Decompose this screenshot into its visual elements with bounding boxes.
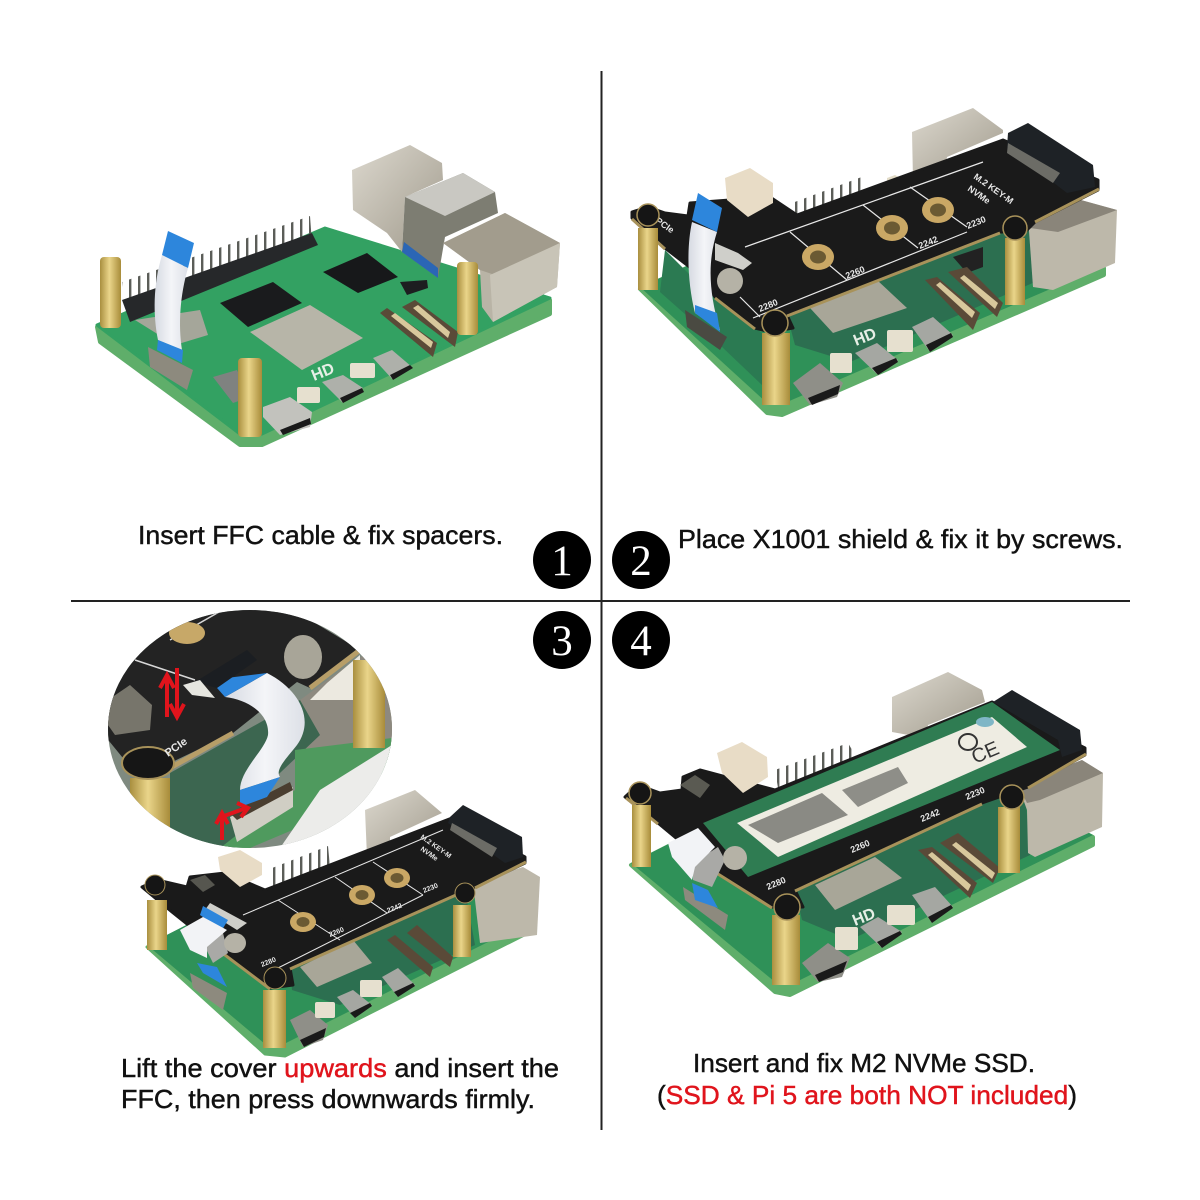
inset board edge	[220, 738, 392, 848]
ethernet port	[1028, 197, 1117, 290]
silkscreen labels: 2242	[917, 234, 939, 251]
silkscreen labels: 2230	[965, 214, 987, 231]
inset hole	[169, 622, 205, 644]
inset FFC cable	[210, 673, 305, 807]
black shield	[142, 818, 526, 989]
step 4 caption: Insert and fix M2 NVMe SSD.	[693, 1048, 1035, 1078]
zoom inset	[108, 610, 392, 848]
standoff	[723, 846, 747, 870]
inset standoff	[284, 635, 322, 679]
silkscreen labels: 2230	[422, 882, 439, 895]
silkscreen labels: M.2 KEY-M	[972, 171, 1015, 206]
brass spacers	[145, 875, 475, 1048]
silkscreen labels: 2242	[386, 902, 403, 915]
M.2 connector	[1007, 123, 1095, 193]
silkscreen labels: 2260	[328, 926, 345, 939]
white JST connector	[725, 168, 773, 217]
step 1 caption: Insert FFC cable & fix spacers.	[138, 520, 503, 550]
USB port	[912, 108, 1003, 180]
GPIO pins	[267, 846, 330, 892]
silkscreen labels	[654, 171, 1015, 314]
step 4 caption	[657, 1048, 1077, 1110]
step 2 caption: Place X1001 shield & fix it by screws.	[678, 524, 1123, 554]
inset shield	[108, 610, 358, 761]
board	[640, 203, 1104, 415]
brass spacers	[100, 257, 478, 437]
HD silkscreen: HD	[851, 325, 879, 350]
GPIO pins	[775, 743, 858, 788]
chip and connectors	[815, 833, 1000, 910]
inset lower connector	[230, 787, 293, 842]
board chip and connectors	[810, 247, 1003, 333]
step 3 caption	[121, 1053, 559, 1114]
GPIO header	[122, 216, 318, 322]
FPC connector on shield	[715, 243, 752, 270]
inset background	[108, 610, 392, 848]
USB-C and HDMI ports	[263, 350, 413, 435]
brass spacers	[629, 782, 1024, 985]
step 4 number badge	[612, 611, 670, 669]
inset label: PCIe	[163, 736, 190, 759]
inset shield ear	[122, 747, 174, 779]
silkscreen labels: 2280	[260, 956, 277, 969]
divider: horizontal line	[71, 600, 1130, 602]
USB ports	[352, 145, 498, 278]
board	[631, 788, 1093, 995]
M.2 connector	[993, 690, 1082, 757]
standoff on shield	[717, 268, 743, 294]
black shield	[632, 140, 1099, 332]
USB port	[892, 672, 985, 738]
white JST connector	[717, 742, 768, 793]
ethernet port	[1018, 760, 1103, 857]
panel 4: SSD installed	[625, 672, 1103, 995]
board	[97, 228, 550, 445]
brass spacers	[637, 204, 1027, 405]
chip and connectors	[300, 925, 453, 987]
shield silkscreen labels: 2242	[919, 807, 941, 824]
HD silkscreen: HD	[309, 360, 337, 385]
panel 3: assembled board	[142, 790, 540, 1056]
shield silkscreen labels: 2260	[849, 838, 871, 855]
silkscreen labels: PCIe	[654, 215, 676, 235]
inductor	[680, 775, 710, 798]
USB-C and HDMI ports	[802, 887, 953, 982]
USB-C and HDMI ports	[793, 317, 953, 405]
M.2 connector	[448, 805, 523, 863]
red arrows	[160, 668, 248, 840]
silkscreen labels: NVMe	[966, 183, 992, 206]
shield silkscreen labels	[765, 785, 986, 892]
HD silkscreen: HD	[850, 905, 878, 930]
step 3 caption: FFC, then press downwards firmly.	[121, 1084, 535, 1114]
shield silkscreen labels: 2230	[964, 785, 986, 802]
silkscreen labels: 2260	[844, 264, 866, 281]
ethernet port	[443, 213, 560, 322]
inset upper connector	[183, 650, 257, 698]
chips	[135, 253, 428, 403]
step 4 number badge: 4	[630, 618, 652, 665]
step 3 caption: Lift the cover upwards and insert the	[121, 1053, 559, 1083]
small white connector	[887, 175, 910, 196]
step 1 number badge	[533, 531, 591, 589]
step 1 number badge: 1	[551, 538, 573, 585]
white JST connector	[218, 850, 262, 887]
FFC cable and connector	[668, 828, 728, 930]
silkscreen labels: NVMe	[419, 846, 439, 863]
USB-C and HDMI ports	[290, 968, 415, 1047]
divider: vertical line	[600, 71, 602, 1130]
silkscreen labels	[260, 834, 452, 969]
SSD module: CE	[968, 737, 1003, 769]
silkscreen labels: 2280	[757, 297, 779, 314]
FFC cable and connector	[180, 903, 247, 1010]
panel 2: X1001 shield fixed on board	[632, 108, 1117, 415]
panel 1: bare board with FFC cable and spacers	[97, 145, 560, 445]
inductor	[190, 875, 215, 892]
mounting holes	[802, 197, 954, 270]
step 3 number badge	[533, 611, 591, 669]
SSD module	[703, 702, 1060, 877]
inset inductor	[108, 685, 152, 735]
inset dark green board area	[170, 700, 320, 848]
step 2 number badge	[612, 531, 670, 589]
FFC connectors	[380, 300, 458, 357]
shield silkscreen labels: 2280	[765, 875, 787, 892]
GPIO header	[792, 175, 867, 222]
step 4 caption: (SSD & Pi 5 are both NOT included)	[657, 1080, 1077, 1110]
board	[147, 868, 530, 1056]
mounting holes	[290, 868, 410, 932]
silkscreen labels: M.2 KEY-M	[419, 834, 452, 860]
black shield	[625, 702, 1086, 908]
step 2 number badge: 2	[630, 538, 652, 585]
standoff	[224, 933, 246, 953]
USB port	[365, 790, 442, 857]
FFC cable	[685, 193, 727, 350]
step 3 number badge: 3	[551, 618, 573, 665]
ethernet port	[473, 867, 540, 943]
inset brass spacers	[353, 660, 385, 748]
FFC cable	[148, 231, 194, 390]
